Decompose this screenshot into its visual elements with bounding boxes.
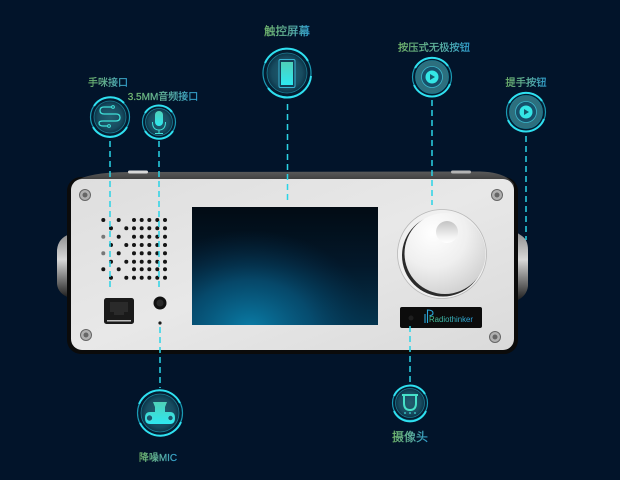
icon: noise reduction mic (138, 390, 182, 436)
left handle (57, 234, 70, 298)
label: camera: 摄像头 (392, 429, 428, 444)
label: handset port: 手咪接口 (88, 76, 128, 89)
front plate (71, 179, 514, 350)
label: noise reduction mic: 降噪MIC (139, 451, 177, 464)
device (57, 170, 528, 354)
touch screen (192, 207, 378, 325)
right handle (516, 232, 528, 301)
body shadow (67, 177, 518, 354)
icon: handle button (506, 92, 546, 132)
speaker grille (101, 218, 167, 280)
top band (74, 172, 514, 195)
audio jack (154, 296, 166, 310)
icon: handset port (90, 97, 130, 137)
mic hole (158, 321, 162, 325)
label: touch screen: 触控屏幕 (264, 24, 310, 38)
label: audio jack: 3.5MM音频接口 (128, 90, 198, 103)
screw bottom left (80, 330, 92, 340)
label: push knob: 按压式无极按钮 (398, 41, 470, 54)
ethernet port (104, 298, 134, 324)
icon: push knob (412, 58, 452, 97)
logo plate: Radiothinker (429, 315, 473, 324)
screw top right (492, 190, 502, 200)
icon: camera (392, 386, 428, 421)
icon: microphone (142, 105, 176, 139)
screw top left (80, 190, 90, 200)
logo plate (400, 307, 482, 328)
label: handle button: 提手按钮 (505, 76, 547, 89)
icon: phone screen (263, 49, 311, 98)
screw bottom right (490, 332, 500, 342)
knob (398, 210, 486, 298)
connector lines (110, 100, 526, 388)
